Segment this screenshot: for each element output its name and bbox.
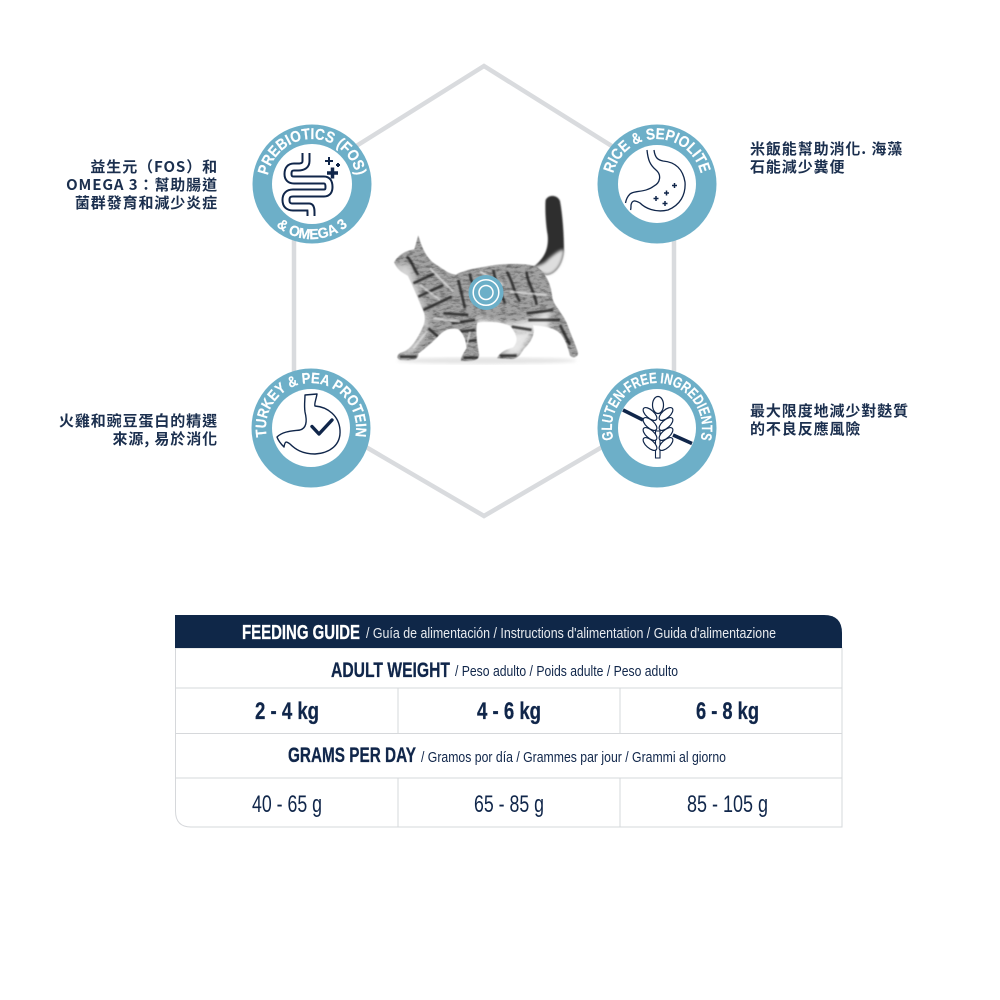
- icon: stomach with plus signs: [626, 150, 685, 211]
- text: gluten description: [750, 400, 909, 439]
- target on cat belly: [468, 275, 504, 310]
- text: prebiotics description: 菌群發育和減少炎症: [75, 192, 218, 213]
- badge: gluten-free ingredients: GLUTEN-FREE INGREDIENTS: [601, 372, 712, 440]
- table header: [175, 615, 842, 648]
- hexagon outline: [294, 66, 674, 516]
- badge: rice and sepiolite: RICE & SEPIOLITE: [603, 128, 711, 174]
- badge: prebiotics: & OMEGA 3: [277, 219, 347, 240]
- text: protein description: 火雞和豌豆蛋白的精選: [59, 410, 218, 431]
- text: prebiotics description: [66, 156, 218, 213]
- text: rice description: [750, 138, 903, 177]
- row: grams per day: [288, 744, 726, 767]
- row: adult weight: ADULT WEIGHT: [331, 659, 450, 682]
- row: grams values: [252, 791, 768, 818]
- badge: rice and sepiolite: [598, 124, 716, 244]
- table header: FEEDING GUIDE: [242, 622, 360, 644]
- icon: stomach with check: [277, 394, 340, 454]
- row: adult weight: / Peso adulto / Poids adulte / Peso adulto: [455, 664, 678, 680]
- badge: turkey and pea protein: [252, 368, 370, 488]
- text: rice description: 米飯能幫助消化. 海藻: [750, 138, 903, 159]
- text: gluten description: 的不良反應風險: [750, 418, 861, 439]
- badge: gluten-free ingredients: [598, 368, 716, 488]
- text: prebiotics description: OMEGA 3：幫助腸道: [66, 174, 218, 195]
- row: weight values: 4 - 6 kg: [477, 698, 541, 725]
- row: grams per day: GRAMS PER DAY: [288, 744, 416, 767]
- text: prebiotics description: 益生元（FOS）和: [90, 156, 218, 177]
- table header: / Guía de alimentación / Instructions d'alimentation / Guida d'alimentazione: [366, 626, 776, 642]
- row: adult weight: [331, 659, 678, 682]
- feeding guide table: [175, 615, 842, 827]
- row: grams per day: / Gramos por día / Grammes par jour / Grammi al giorno: [421, 750, 726, 766]
- row: grams values: 85 - 105 g: [687, 791, 768, 818]
- text: gluten description: 最大限度地減少對麩質: [750, 400, 909, 421]
- icon: intestine: [286, 153, 340, 216]
- badge: prebiotics: [252, 124, 372, 244]
- row: grams values: 65 - 85 g: [474, 791, 544, 818]
- icon: crossed wheat: [623, 396, 692, 458]
- text: protein description: 來源, 易於消化: [113, 428, 218, 449]
- badge: prebiotics: PREBIOTICS (FOS): [258, 128, 367, 175]
- badge: turkey and pea protein: TURKEY & PEA PROTEIN: [255, 372, 367, 438]
- row: weight values: 2 - 4 kg: [255, 698, 319, 725]
- row: weight values: [255, 698, 759, 725]
- text: rice description: 石能減少糞便: [750, 156, 845, 177]
- row: grams values: 40 - 65 g: [252, 791, 322, 818]
- cat illustration: [390, 196, 583, 365]
- row: weight values: 6 - 8 kg: [696, 698, 759, 725]
- text: protein description: [59, 410, 218, 449]
